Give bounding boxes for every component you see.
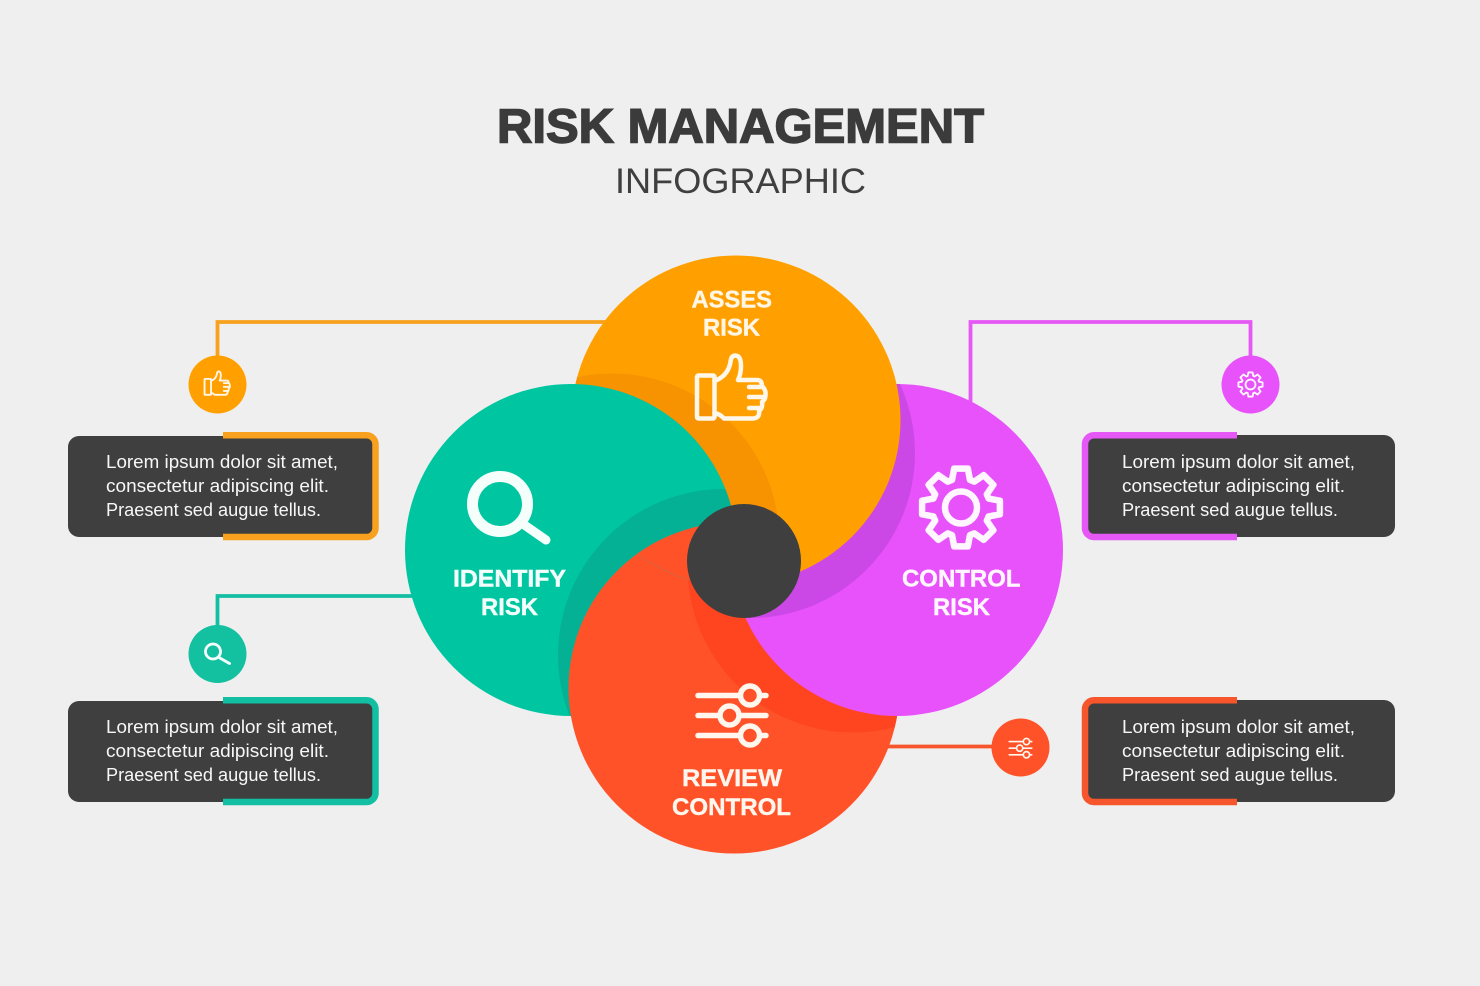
label: asses risk <box>692 286 772 342</box>
text panel: asses risk <box>68 435 376 537</box>
text panel: control risk: consectetur adipiscing elit. <box>1122 476 1345 496</box>
text panel: identify risk <box>68 700 376 802</box>
label: review control <box>672 765 791 821</box>
icon: sliders <box>698 686 766 745</box>
badge: gear <box>1222 356 1280 414</box>
circle: review control <box>568 554 898 854</box>
connector: control risk <box>970 322 1250 404</box>
label: asses risk: ASSES <box>692 286 772 314</box>
icon: gear <box>922 469 1000 546</box>
connector: asses risk <box>218 322 606 358</box>
text panel: asses risk: consectetur adipiscing elit. <box>106 476 329 496</box>
text panel: identify risk: Lorem ipsum dolor sit amet, <box>106 717 338 737</box>
central swirl diagram <box>405 256 1063 854</box>
label: identify risk: RISK <box>481 594 539 621</box>
text panel: review control: Lorem ipsum dolor sit amet, <box>1122 717 1355 737</box>
icon: magnifier <box>472 476 546 540</box>
overlap: review control over identify risk <box>637 526 699 580</box>
text panel: identify risk: Praesent sed augue tellus. <box>106 765 321 785</box>
subtitle: INFOGRAPHIC <box>615 161 866 201</box>
text panel: review control <box>1085 700 1395 802</box>
label: identify risk <box>453 566 566 621</box>
text panel: review control: Praesent sed augue tellus. <box>1122 765 1338 785</box>
center hub <box>687 504 801 618</box>
label: review control: REVIEW <box>682 765 782 792</box>
badge: magnifier <box>188 625 246 683</box>
text panel: review control: consectetur adipiscing elit. <box>1122 741 1345 761</box>
circle: control risk <box>746 384 1063 716</box>
circle: identify risk <box>405 384 637 716</box>
text panel: control risk: Lorem ipsum dolor sit amet, <box>1122 452 1355 472</box>
text panel: asses risk: Lorem ipsum dolor sit amet, <box>106 452 338 472</box>
text panel: identify risk: consectetur adipiscing elit. <box>106 741 329 761</box>
text panel: control risk <box>1085 435 1395 537</box>
badge: thumbs up <box>188 356 246 414</box>
connector: review control <box>886 745 994 748</box>
label: control risk: RISK <box>933 594 991 621</box>
circle: asses risk <box>575 256 900 572</box>
title: RISK MANAGEMENT <box>497 100 984 154</box>
label: identify risk: IDENTIFY <box>453 566 566 592</box>
label: control risk: CONTROL <box>902 566 1020 592</box>
label: review control: CONTROL <box>672 794 791 821</box>
overlap: identify risk over asses risk <box>572 384 731 580</box>
icon: thumbs up <box>697 356 766 418</box>
text panel: control risk: Praesent sed augue tellus. <box>1122 500 1338 520</box>
label: asses risk: RISK <box>703 314 761 342</box>
label: control risk <box>902 566 1020 621</box>
text panel: asses risk: Praesent sed augue tellus. <box>106 500 321 520</box>
badge: sliders <box>992 718 1050 776</box>
connector: identify risk <box>218 596 416 627</box>
